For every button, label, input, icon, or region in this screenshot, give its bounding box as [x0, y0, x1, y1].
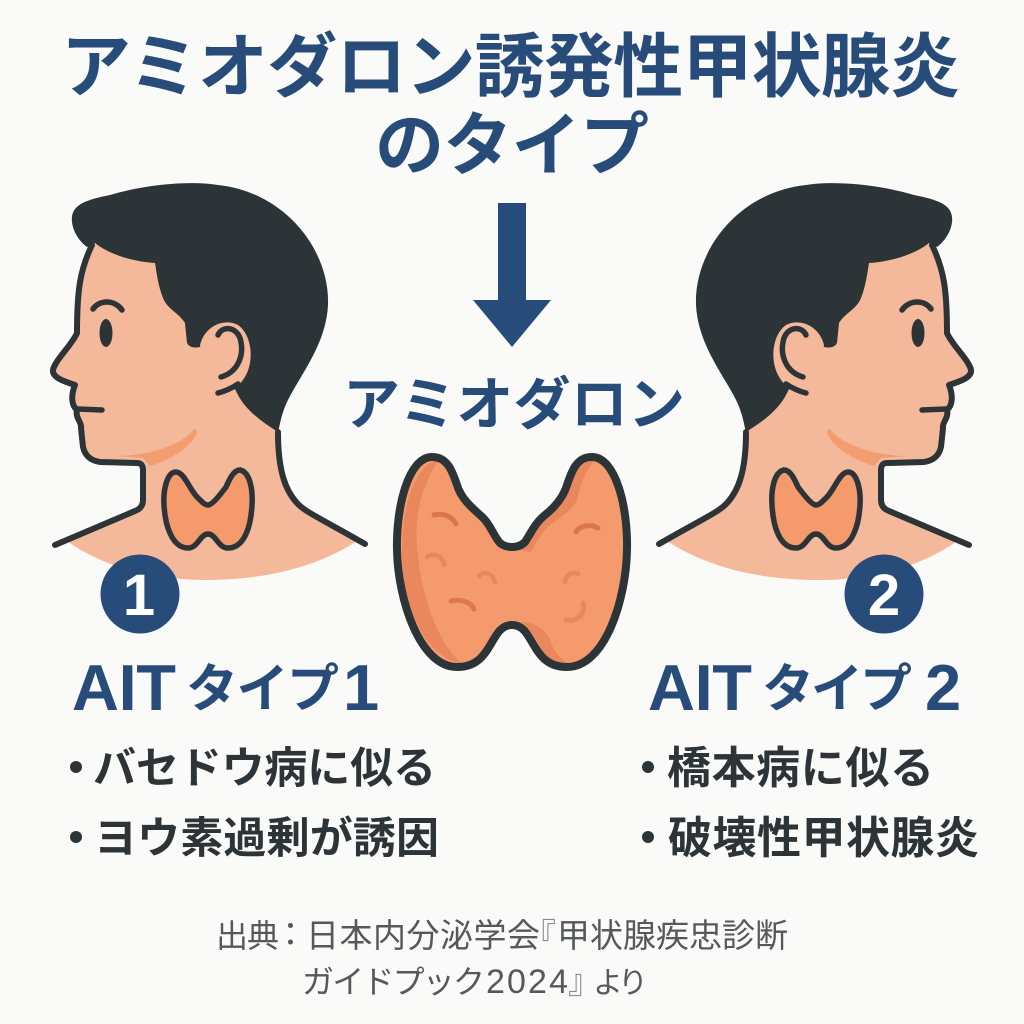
- list: type 1 features: [70, 745, 439, 863]
- badge: 1: 1: [123, 563, 155, 628]
- title: アミオダロン誘発性甲状腺炎: [61, 28, 960, 106]
- heading: AIT type 1: 1: [343, 651, 379, 724]
- source note: より: [593, 967, 648, 1000]
- source note: 2024: [486, 963, 568, 1001]
- source note: ：: [274, 916, 307, 953]
- list: type 1 features: ヨウ素過剰が誘因: [94, 815, 439, 863]
- badge: 1: [100, 554, 180, 634]
- heading: AIT type 1: タイプ: [186, 661, 339, 719]
- source note: 出典: [216, 918, 279, 954]
- source note: 甲状腺疾忠診断: [557, 917, 788, 954]
- list: type 1 features: バセドウ病に似る: [93, 745, 436, 793]
- source note: 日本内分泌学会: [306, 917, 540, 954]
- heading: AIT type 1: AIT: [72, 651, 176, 724]
- heading: AIT type 2: 2: [925, 651, 961, 724]
- head profile: type 2: [659, 183, 971, 580]
- icon: small thyroid 1: [164, 470, 252, 548]
- heading: AIT type 2: AIT: [648, 651, 752, 724]
- source note: 』: [568, 963, 601, 1000]
- title: のタイプ: [375, 107, 649, 184]
- list: type 2 features: 橋本病に似る: [667, 744, 934, 793]
- list: type 2 features: 破壊性甲状腺炎: [668, 814, 979, 863]
- source note: ガイドプック: [302, 964, 485, 1000]
- icon: small thyroid 2: [772, 470, 860, 548]
- source note: [216, 916, 788, 1001]
- head profile: type 1: [53, 183, 365, 580]
- badge: 2: 2: [868, 563, 900, 628]
- heading: AIT type 1: [72, 651, 379, 724]
- arrow: down: [473, 203, 551, 347]
- title: [61, 28, 960, 184]
- source note: 『: [523, 917, 556, 954]
- list: type 2 features: [642, 744, 979, 863]
- icon: large thyroid: [397, 457, 627, 667]
- label: amiodarone: アミオダロン: [343, 373, 685, 437]
- badge: 2: [844, 554, 924, 634]
- heading: AIT type 2: [648, 651, 961, 724]
- heading: AIT type 2: タイプ: [762, 661, 912, 719]
